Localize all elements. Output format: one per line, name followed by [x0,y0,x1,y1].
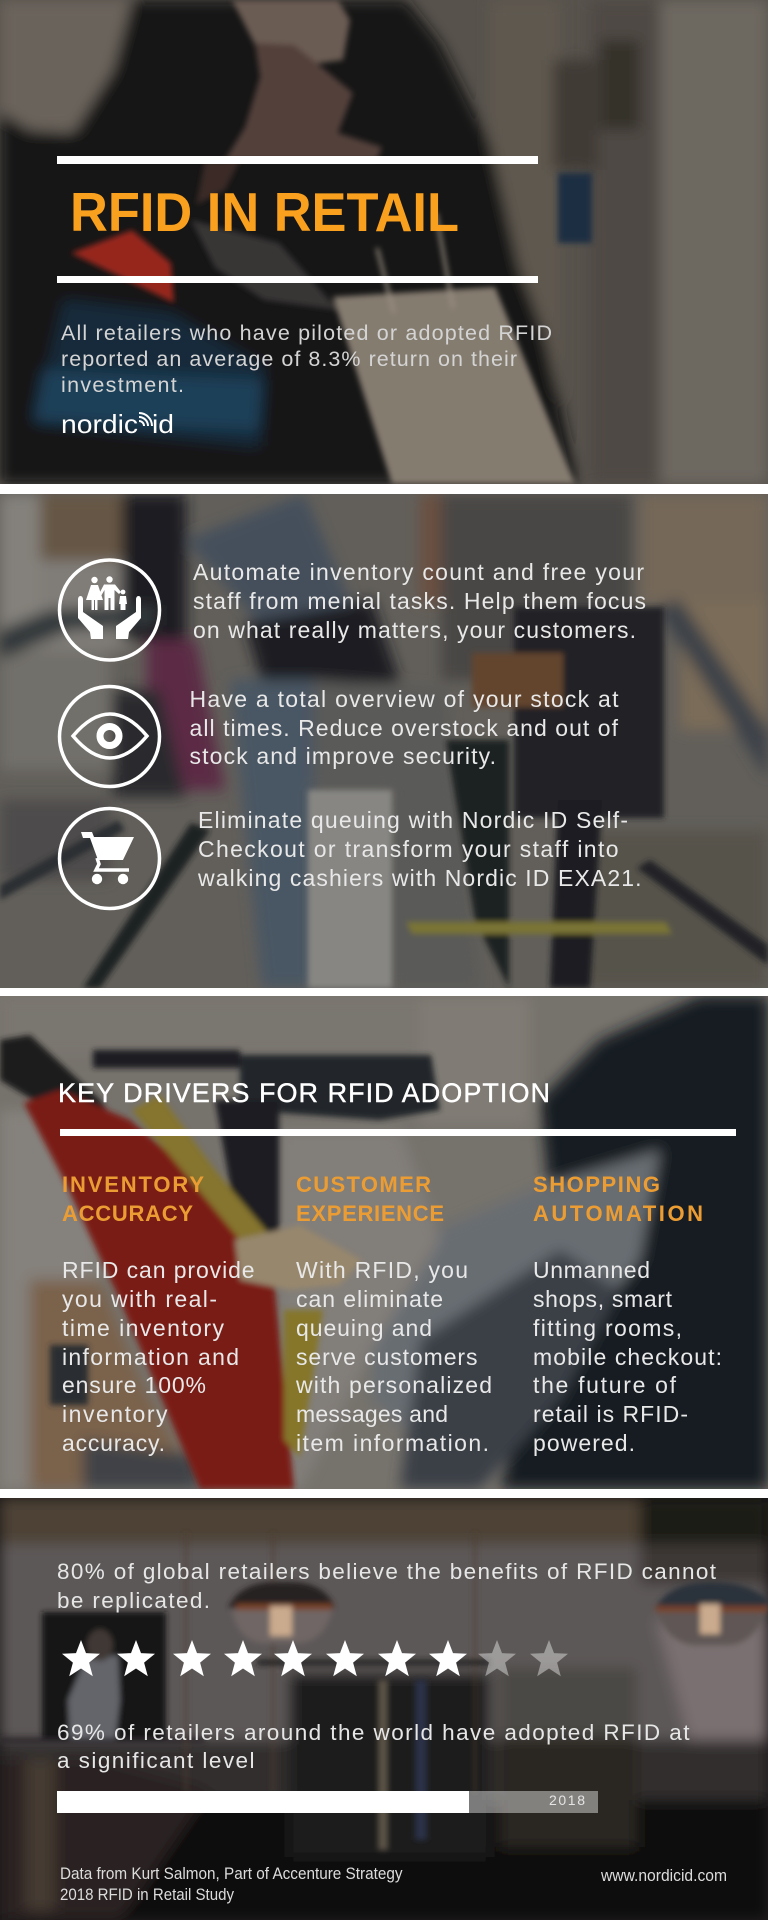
center lamp [228,1582,335,1608]
panel: hero [0,0,768,484]
heading rule [60,1129,736,1136]
column heading [533,1172,703,1226]
column text: Unmanned [533,1257,650,1283]
website: www.nordicid.com [600,1867,727,1885]
benefit text 3: Checkout or transform your staff into [198,836,618,862]
column text: fitting rooms, [533,1315,682,1341]
stat text 69% [57,1720,690,1773]
logo: nordic id [61,409,174,439]
column heading: EXPERIENCE [296,1201,444,1226]
column text: mobile checkout: [533,1344,722,1370]
benefit text 1: staff from menial tasks. Help them focus [193,588,646,614]
panel: key drivers [0,996,768,1489]
benefit text 2: Have a total overview of your stock at [190,686,619,712]
column heading: CUSTOMER [296,1172,431,1197]
column text: retail is RFID- [533,1401,688,1427]
source note: Data from Kurt Salmon, Part of Accenture Strategy [60,1865,403,1883]
icon: eye [60,686,160,786]
column text: RFID can provide [62,1257,255,1283]
intro text: All retailers who have piloted or adopted RFID [61,321,552,345]
statistics photo: boutique interior [0,1498,768,1920]
column text: messages and [296,1401,448,1427]
intro text: reported an average of 8.3% return on their [61,347,517,371]
icon: family in hands [60,560,160,660]
panel: benefits [0,494,768,988]
column text: accuracy. [62,1430,165,1456]
benefit text 2: stock and improve security. [190,743,496,769]
column heading: AUTOMATION [533,1201,703,1226]
heading: KEY DRIVERS FOR RFID ADOPTION [58,1078,550,1108]
column text: the future of [533,1372,677,1398]
stat text 80%: be replicated. [57,1588,210,1613]
benefit text 2 [190,686,619,769]
benefit text 1: Automate inventory count and free your [193,559,644,585]
stat text 80% [57,1559,717,1613]
column: customer experience [295,1172,492,1456]
column text [295,1257,492,1456]
source note: 2018 RFID in Retail Study [60,1886,235,1904]
column text: inventory [62,1401,168,1427]
benefit text 3: Eliminate queuing with Nordic ID Self- [198,807,628,833]
column: inventory accuracy [62,1172,255,1456]
column text: can eliminate [296,1286,443,1312]
divider top [57,156,538,164]
benefit text 1 [193,559,646,643]
column text [533,1257,722,1456]
progress bar: 2018 [549,1792,585,1808]
benefits photo: shoppers on escalator [0,494,768,988]
star rating [62,1640,568,1676]
column text: powered. [533,1430,635,1456]
title: RFID IN RETAIL [70,181,459,243]
benefit 2 [60,686,619,786]
column text: With RFID, you [296,1257,468,1283]
benefit text 2: all times. Reduce overstock and out of [190,715,619,741]
icon: shopping cart [60,808,160,908]
column text: queuing and [296,1315,432,1341]
benefit 3 [60,807,642,908]
benefit text 3: walking cashiers with Nordic ID EXA21. [197,865,642,891]
logo: nordic id: nordic [61,409,138,439]
intro text [61,321,552,397]
column text: serve customers [296,1344,478,1370]
source note [60,1865,403,1904]
key drivers photo: clothes rail [0,996,768,1489]
column text: information and [62,1344,239,1370]
benefit 1 [60,559,646,660]
column heading [62,1172,204,1226]
column text [62,1257,255,1456]
progress bar [57,1791,598,1813]
benefit text 3 [197,807,642,891]
hero photo: shopper holding bags [0,0,768,484]
column text: you with real- [62,1286,217,1312]
column text: time inventory [62,1315,224,1341]
benefit text 1: on what really matters, your customers. [193,617,636,643]
stat text 69%: 69% of retailers around the world have adopted RFID at [57,1720,690,1745]
panel: statistics [0,1498,768,1920]
column text: shops, smart [533,1286,673,1312]
column heading [296,1172,444,1226]
column text: with personalized [295,1372,492,1398]
divider bottom [57,276,538,283]
column heading: ACCURACY [62,1201,193,1226]
intro text: investment. [61,373,184,397]
column text: item information. [296,1430,489,1456]
column text: ensure 100% [62,1372,206,1398]
right lamp [655,1582,768,1608]
stat text 69%: a significant level [57,1748,254,1773]
column: shopping automation [533,1172,722,1456]
stat text 80%: 80% of global retailers believe the benefits of RFID cannot [57,1559,717,1584]
logo: nordic id: id [152,409,174,439]
column heading: INVENTORY [62,1172,204,1197]
column heading: SHOPPING [533,1172,660,1197]
